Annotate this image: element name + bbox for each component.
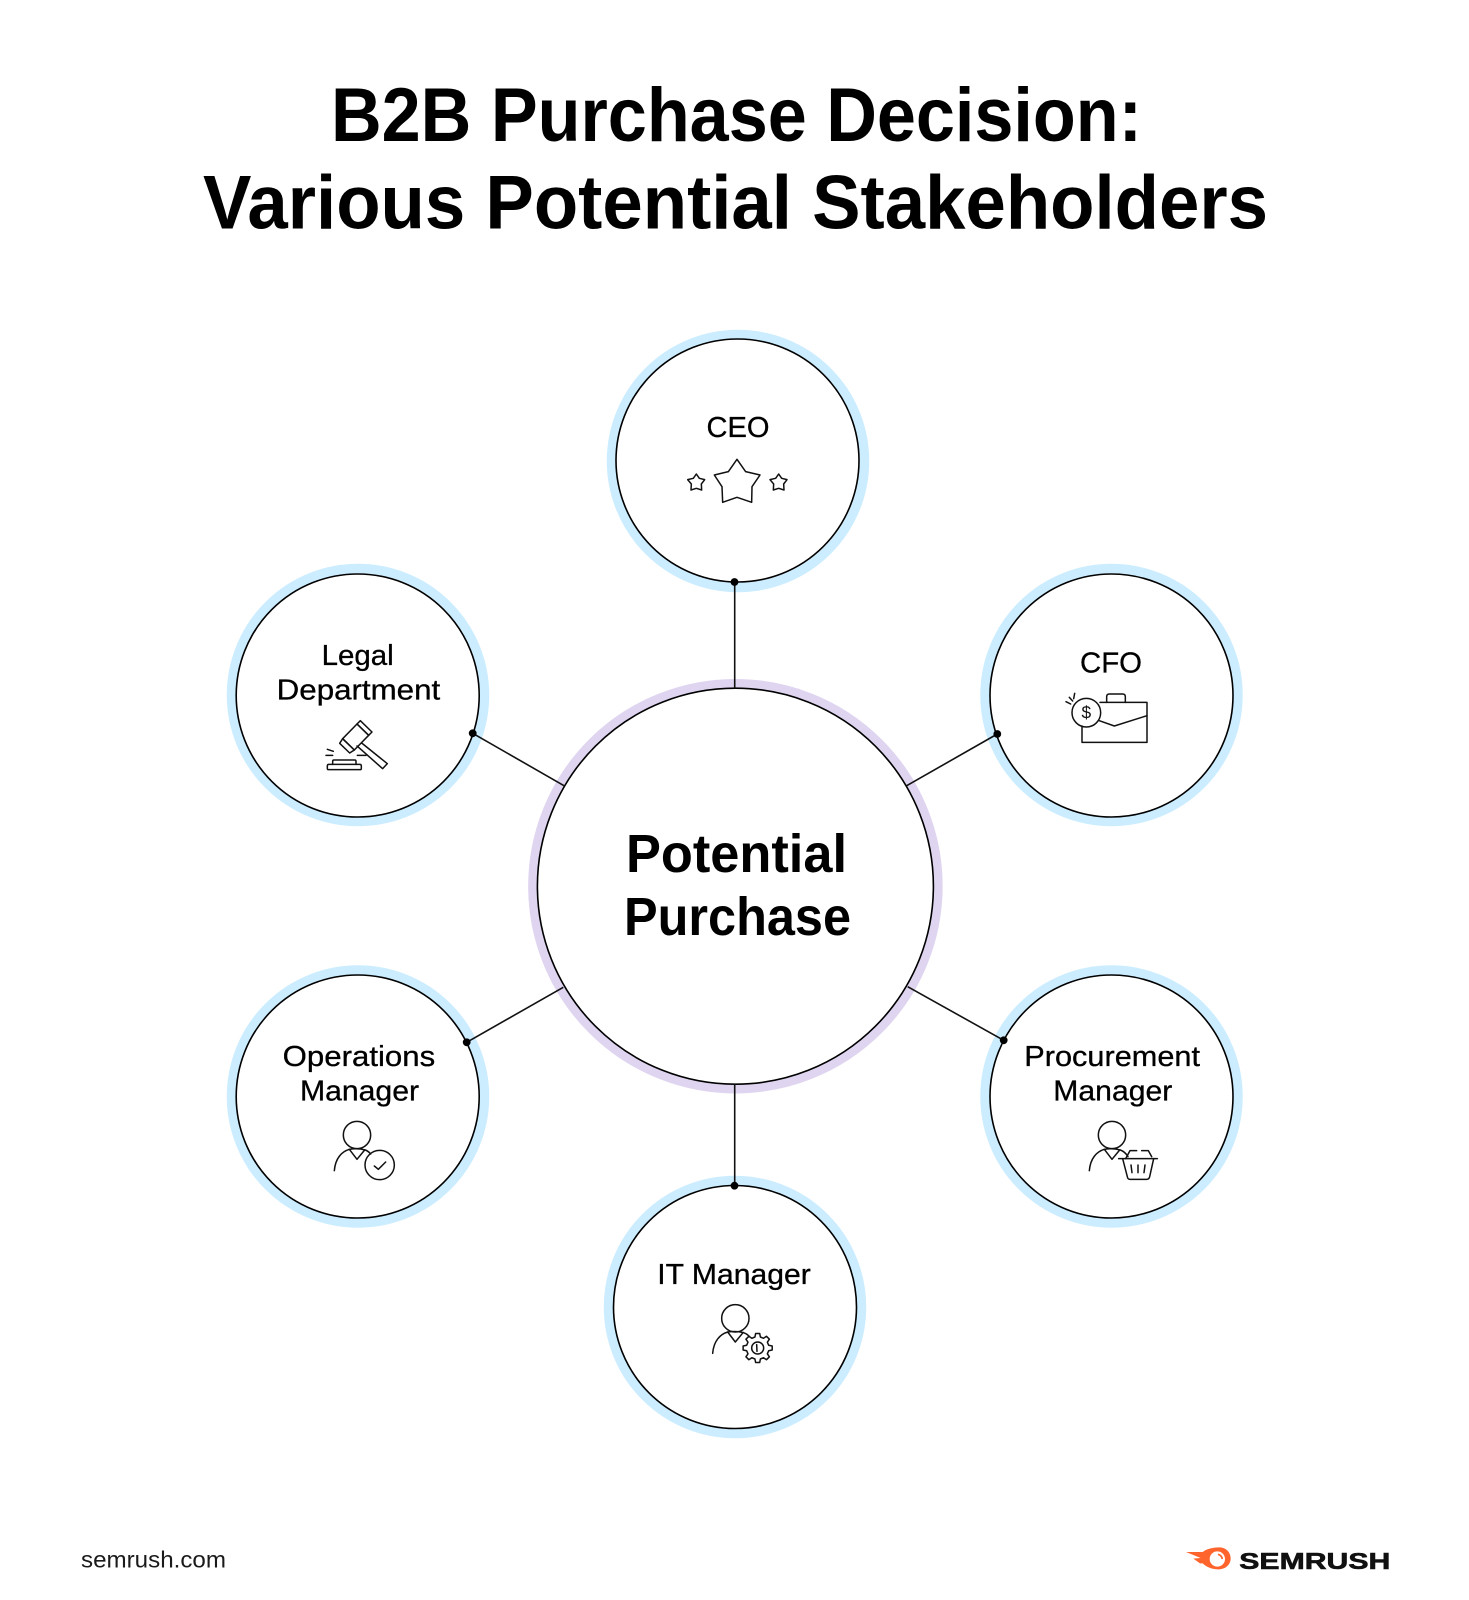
icon: three stars: [688, 459, 787, 502]
Legal label: Department: [277, 674, 440, 706]
CFO outline: [990, 574, 1233, 817]
CFO ring: [985, 568, 1238, 822]
Procurement ring: [985, 970, 1238, 1223]
center label: [624, 824, 851, 947]
icon: person with gear: [713, 1305, 772, 1363]
panel: center Potential Purchase: [533, 684, 938, 1089]
Procurement label: Manager: [1053, 1076, 1173, 1108]
icon: gavel: [326, 721, 387, 770]
icon: briefcase with dollar coin: $: [1082, 703, 1092, 723]
panel: Procurement Manager: [985, 970, 1238, 1223]
Procurement label: [1024, 1041, 1200, 1108]
title: Various Potential Stakeholders: [203, 160, 1268, 245]
icon: briefcase with dollar coin: [1066, 693, 1147, 742]
panel: IT Manager: [608, 1180, 862, 1434]
icon: Semrush flame: [1186, 1547, 1231, 1569]
connector lines with end dots: [463, 578, 1008, 1190]
title: [203, 73, 1268, 245]
panel: Legal Department: [232, 568, 484, 822]
IT label: IT Manager: [657, 1259, 811, 1291]
center outline: [537, 688, 933, 1084]
panel: CEO: [612, 334, 864, 588]
Legal label: [277, 640, 440, 706]
CEO label: CEO: [706, 412, 770, 444]
Legal outline: [236, 574, 479, 817]
Operations outline: [236, 975, 479, 1218]
center label: Purchase: [624, 887, 851, 947]
Procurement label: Procurement: [1024, 1041, 1200, 1073]
Operations label: [283, 1041, 435, 1108]
icon: person with check mark: [334, 1121, 394, 1180]
Legal ring: [232, 568, 484, 822]
panel: CFO: [985, 568, 1238, 822]
Legal label: Legal: [322, 640, 394, 672]
icon: person with shopping basket: [1089, 1121, 1157, 1179]
IT ring: [608, 1180, 862, 1434]
Operations ring: [232, 970, 484, 1223]
CFO label: CFO: [1080, 648, 1142, 680]
panel: Operations Manager: [232, 970, 484, 1223]
Operations label: Manager: [300, 1076, 420, 1108]
CEO outline: [616, 339, 859, 582]
CEO ring: [612, 334, 864, 588]
IT outline: [614, 1186, 856, 1428]
footer: website: semrush.com: [81, 1546, 226, 1572]
title: B2B Purchase Decision:: [331, 73, 1142, 158]
Procurement outline: [990, 975, 1233, 1218]
logo wordmark: SEMRUSH: [1239, 1548, 1390, 1574]
footer: Semrush logo: [1186, 1547, 1390, 1574]
center ring: [533, 684, 938, 1089]
Operations label: Operations: [283, 1041, 435, 1073]
center label: Potential: [626, 824, 847, 884]
